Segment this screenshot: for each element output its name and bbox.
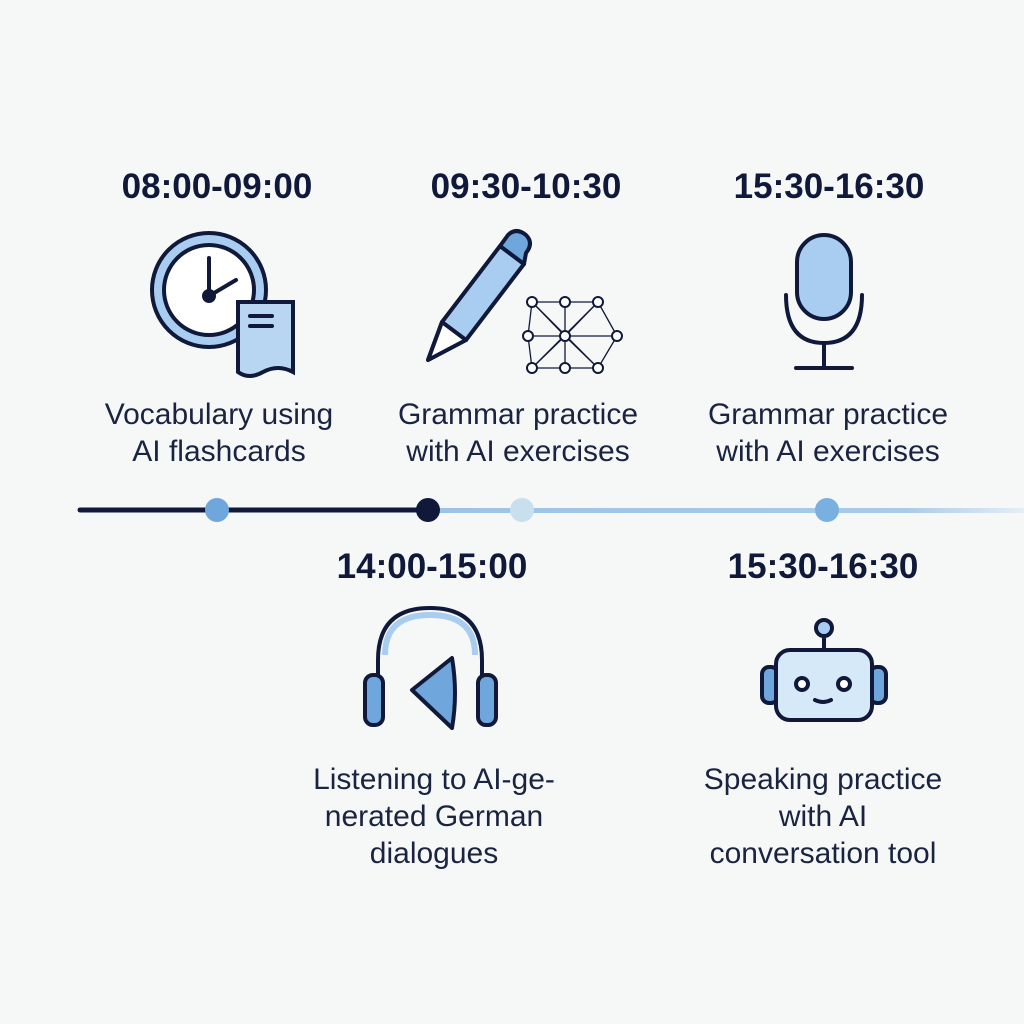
text: grammar 2: with AI exercises: [716, 435, 940, 468]
icon: robot: [762, 620, 886, 720]
text: grammar 1: [398, 398, 638, 468]
text: grammar 2: [708, 398, 948, 468]
text: speaking: conversation tool: [710, 837, 936, 870]
heading: 15:30-16:30 bottom: 15:30-16:30: [728, 547, 918, 586]
heading: 14:00-15:00: 14:00-15:00: [337, 547, 527, 586]
icon: microphone: [786, 235, 862, 368]
text: grammar 1: with AI exercises: [406, 435, 630, 468]
text: vocabulary: Vocabulary using: [105, 398, 333, 431]
timeline: [80, 498, 1024, 522]
heading: 15:30-16:30 top: 15:30-16:30: [734, 167, 924, 206]
text: vocabulary: AI flashcards: [132, 435, 306, 468]
text: vocabulary: [104, 398, 333, 468]
heading: 09:30-10:30: 09:30-10:30: [431, 167, 621, 206]
text: speaking: [704, 763, 942, 870]
text: listening: [313, 763, 555, 870]
text: grammar 1: Grammar practice: [398, 398, 638, 431]
text: grammar 2: Grammar practice: [708, 398, 948, 431]
icon: headphones: [365, 608, 496, 728]
icon: clock with book: [152, 233, 293, 376]
icon: pencil and network: [428, 231, 622, 373]
text: speaking: Speaking practice: [704, 763, 942, 796]
text: listening: nerated German: [325, 800, 543, 833]
text: listening: dialogues: [370, 837, 498, 870]
heading: 08:00-09:00: 08:00-09:00: [122, 167, 312, 206]
text: listening: Listening to AI-ge-: [313, 763, 555, 796]
text: speaking: with AI: [779, 800, 867, 833]
